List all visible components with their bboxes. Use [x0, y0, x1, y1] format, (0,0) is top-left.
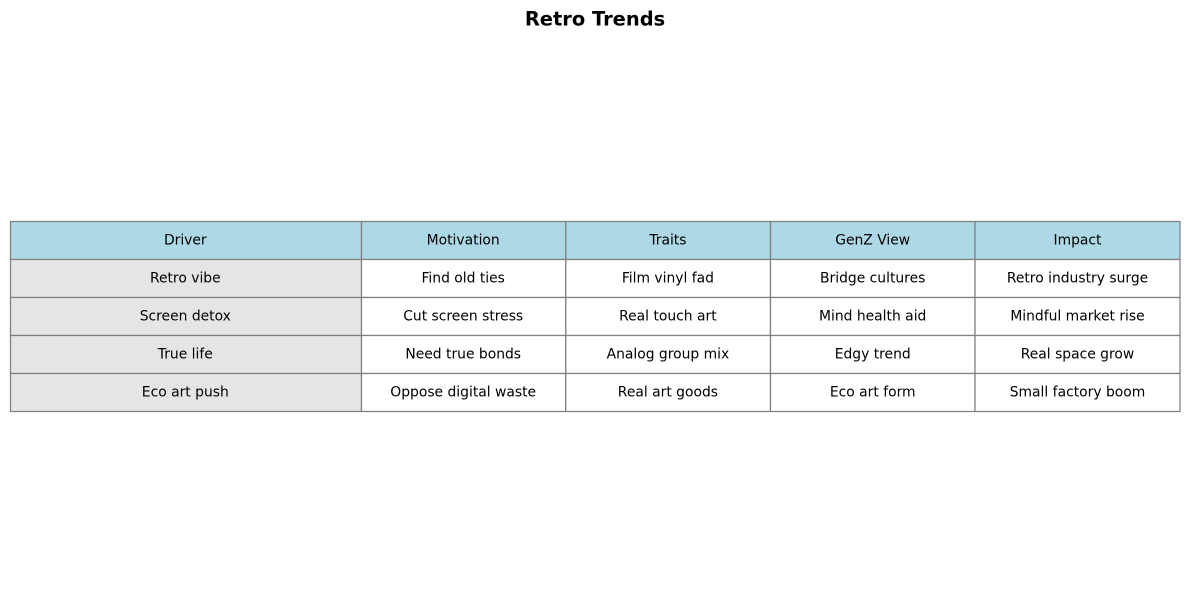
header row: Driver: [164, 233, 207, 249]
row: Eco art push: Small factory boom: [1010, 385, 1145, 401]
row: True life: Analog group mix: [607, 347, 729, 363]
row: True life: Edgy trend: [835, 347, 911, 363]
row: Screen detox: Mind health aid: [819, 309, 926, 325]
table: [10, 222, 1180, 412]
row: Screen detox: Screen detox: [140, 309, 231, 325]
row: Retro vibe: Film vinyl fad: [622, 271, 714, 287]
row: Screen detox: Real touch art: [619, 309, 717, 325]
header row: [10, 222, 1180, 260]
row: True life: True life: [157, 347, 213, 363]
row: Retro vibe: Retro industry surge: [1007, 271, 1148, 287]
row: Retro vibe: Bridge cultures: [820, 271, 925, 287]
row: Retro vibe: Find old ties: [421, 271, 505, 287]
header row: Traits: [648, 233, 686, 249]
row: Eco art push: [10, 374, 1180, 412]
row: Retro vibe: [10, 260, 1180, 298]
row: True life: Real space grow: [1021, 347, 1134, 363]
row: Eco art push: Real art goods: [618, 385, 718, 401]
row: Screen detox: [10, 298, 1180, 336]
header row: Motivation: [427, 233, 500, 249]
header row: GenZ View: [835, 233, 910, 249]
row: Eco art push: Eco art form: [830, 385, 916, 401]
row: Eco art push: Oppose digital waste: [390, 385, 536, 401]
row: Eco art push: Eco art push: [142, 385, 229, 401]
header row: Impact: [1054, 233, 1102, 249]
row: True life: Need true bonds: [405, 347, 521, 363]
row: True life: [10, 336, 1180, 374]
row: Retro vibe: Retro vibe: [150, 271, 221, 287]
title: Retro Trends: [525, 8, 665, 31]
row: Screen detox: Cut screen stress: [403, 309, 523, 325]
row: Screen detox: Mindful market rise: [1010, 309, 1145, 325]
